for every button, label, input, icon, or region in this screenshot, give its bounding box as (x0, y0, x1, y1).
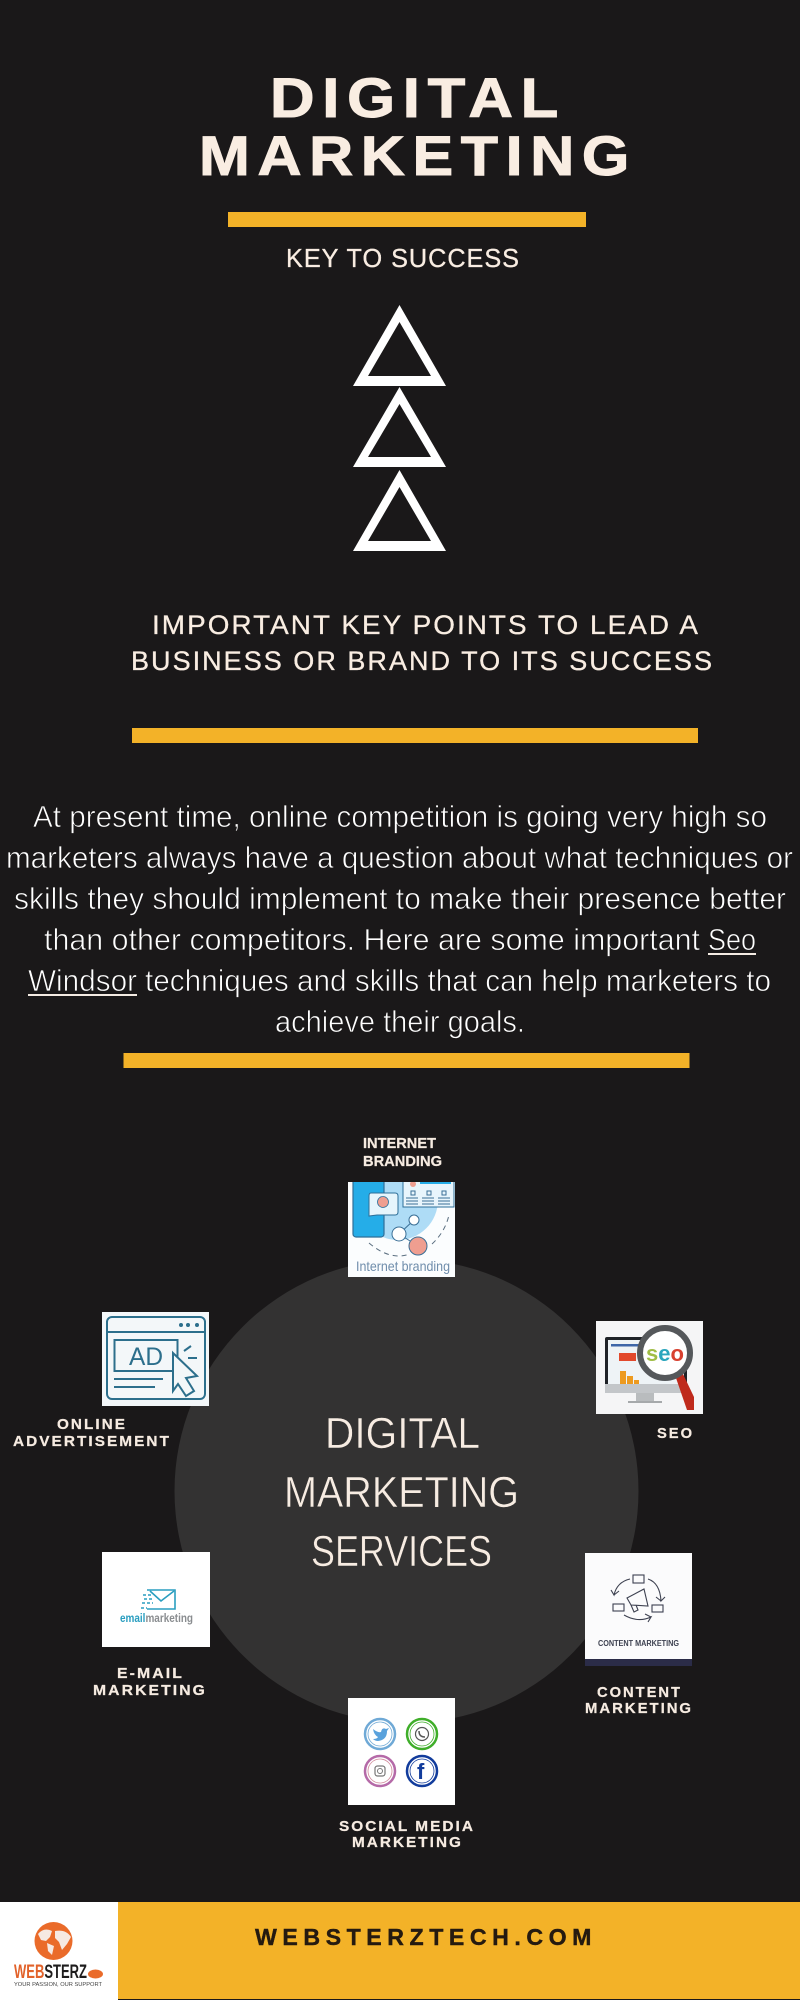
accent bar under title (228, 212, 586, 227)
label: content marketing (585, 1684, 693, 1717)
icon: online advertisement: AD (129, 1343, 163, 1371)
intro paragraph: techniques and skills that can help marketers to (145, 963, 771, 998)
intro paragraph: achieve their goals. (275, 1004, 525, 1039)
section heading: IMPORTANT KEY POINTS TO LEAD A (152, 610, 700, 640)
label: seo: SEO (657, 1425, 694, 1442)
label: internet branding: INTERNET (363, 1135, 436, 1152)
intro paragraph (6, 799, 793, 1039)
label: online advertisement: ADVERTISEMENT (13, 1433, 171, 1450)
icon: internet branding (348, 1182, 455, 1277)
footer band (0, 1902, 800, 2000)
central title: DIGITAL (325, 1409, 480, 1458)
intro paragraph: than other competitors. Here are some important (44, 922, 700, 957)
website address: WEBSTERZTECH.COM (255, 1924, 597, 1950)
subtitle: KEY TO SUCCESS (286, 243, 520, 273)
section heading (131, 610, 714, 676)
icon: content marketing: CONTENT MARKETING (598, 1639, 679, 1648)
label: social media marketing: SOCIAL MEDIA (339, 1818, 475, 1835)
intro paragraph: Windsor (28, 963, 137, 998)
icon: websterz logo: YOUR PASSION, OUR SUPPORT (14, 1982, 103, 1988)
label: email marketing: E-MAIL (117, 1665, 184, 1682)
intro paragraph: Seo (708, 922, 756, 957)
central circle (174, 1259, 638, 1723)
accent bar below paragraph (124, 1053, 690, 1068)
accent bar above paragraph (132, 728, 698, 743)
section heading: BUSINESS OR BRAND TO ITS SUCCESS (131, 646, 714, 676)
label: social media marketing (339, 1818, 475, 1851)
central title: MARKETING (284, 1468, 519, 1517)
icon: stacked triangles (353, 305, 446, 551)
label: social media marketing: MARKETING (352, 1834, 463, 1851)
icon: websterz logo: WEBSTERZ (14, 1962, 87, 1983)
label: online advertisement: ONLINE (57, 1416, 127, 1433)
central title (284, 1409, 519, 1576)
title: DIGITAL (270, 66, 566, 129)
icon: seo (596, 1321, 703, 1414)
label: internet branding (363, 1135, 442, 1170)
icon: social media: f (417, 1759, 425, 1784)
label: email marketing: MARKETING (93, 1682, 207, 1699)
icon: social media (348, 1698, 455, 1805)
intro paragraph: skills they should implement to make their presence better (14, 881, 786, 916)
label: internet branding: BRANDING (363, 1153, 442, 1170)
intro paragraph: At present time, online competition is going very high so (33, 799, 767, 834)
label: email marketing (93, 1665, 207, 1699)
label: content marketing: MARKETING (585, 1700, 693, 1717)
icon: online advertisement (102, 1312, 209, 1406)
icon: email marketing (102, 1552, 210, 1647)
title (199, 66, 637, 187)
icon: internet branding: Internet branding (356, 1258, 450, 1274)
central title: SERVICES (311, 1527, 492, 1576)
icon: seo: seo (646, 1341, 684, 1366)
icon: email marketing: emailmarketing (120, 1611, 193, 1625)
icon: websterz logo (14, 1922, 103, 1988)
title: MARKETING (199, 124, 637, 187)
label: online advertisement (13, 1416, 171, 1450)
icon: content marketing (585, 1553, 692, 1666)
label: content marketing: CONTENT (597, 1684, 682, 1701)
